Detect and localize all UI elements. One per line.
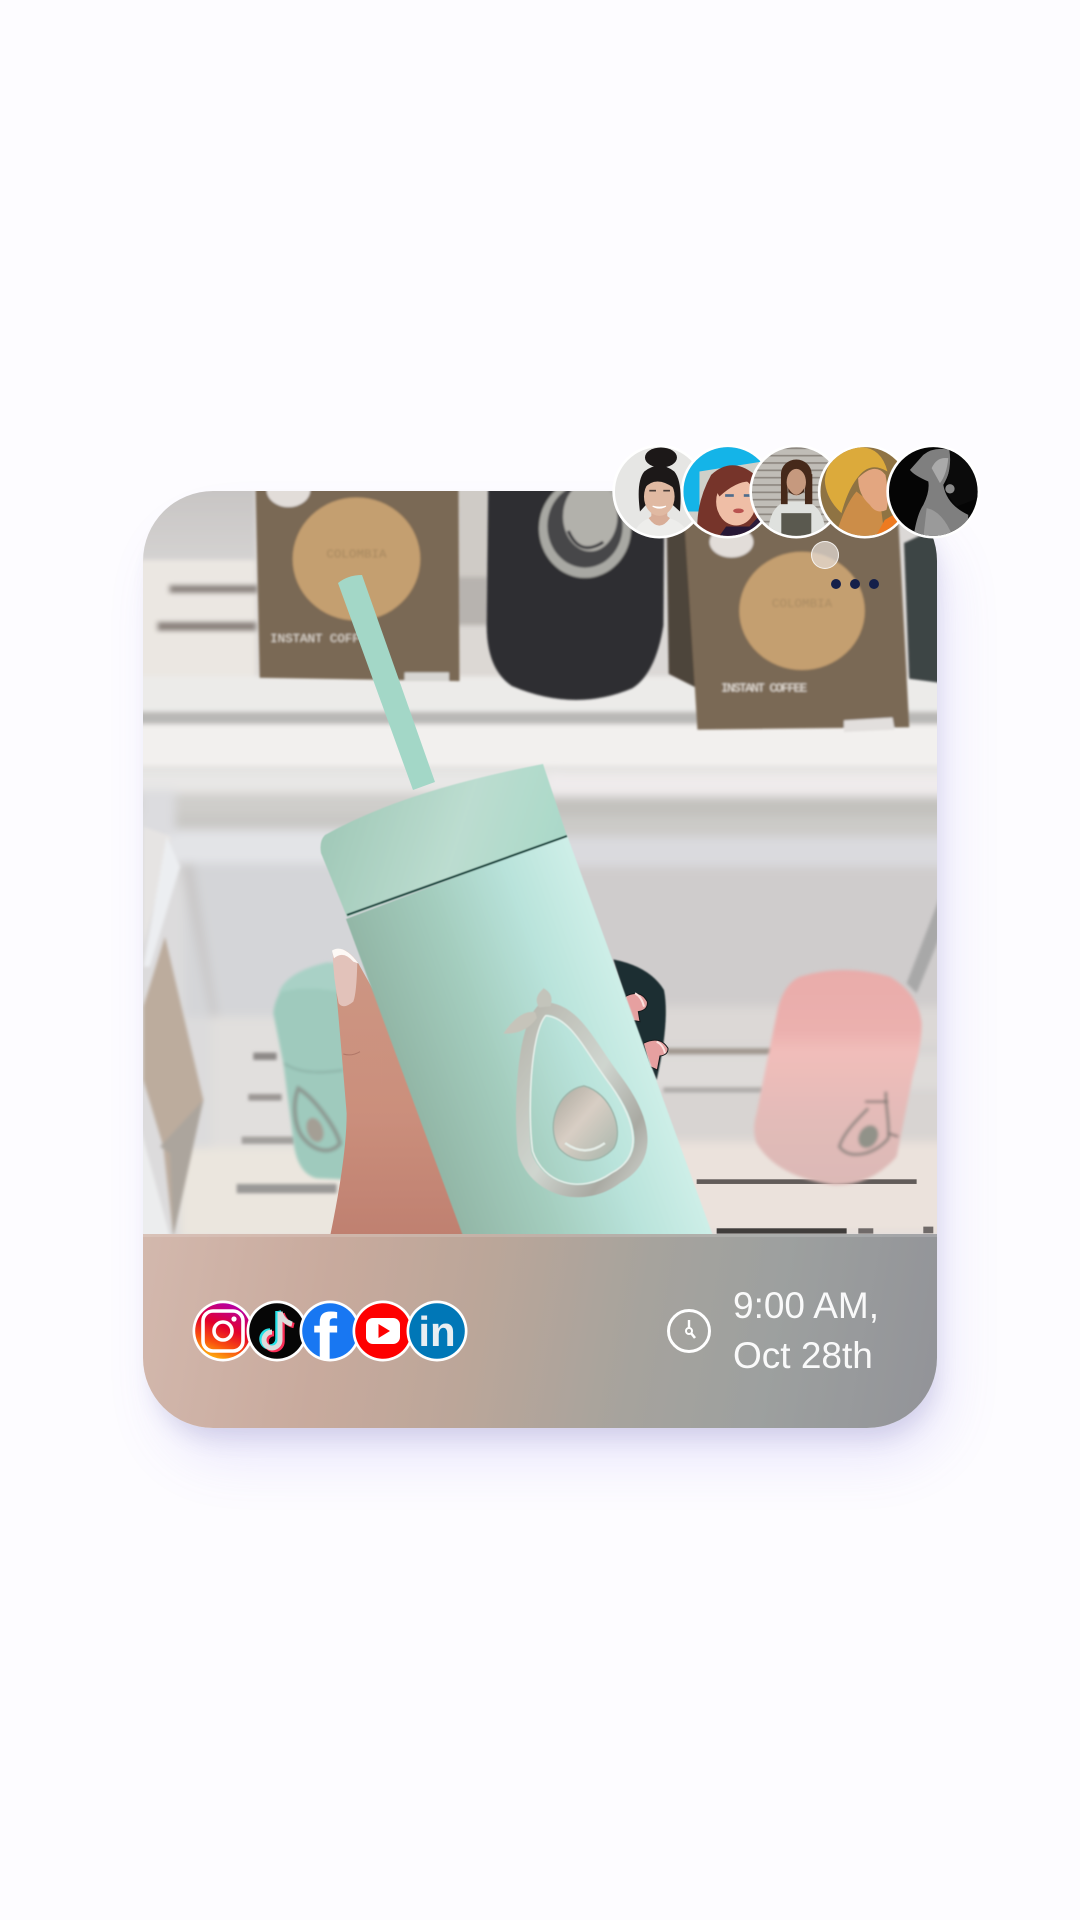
coffee box right <box>666 480 946 732</box>
schedule date and time: Oct 28th <box>733 1335 873 1376</box>
blurred pink tumbler <box>754 970 922 1185</box>
tumbler <box>320 764 713 1236</box>
upper shelf scene <box>130 472 967 819</box>
straw <box>338 575 435 790</box>
avatar 2 <box>680 447 762 538</box>
product photo: mint tumbler on a shelf <box>143 491 937 1234</box>
blurred mint tumbler <box>273 963 357 1180</box>
black bottle <box>487 479 665 700</box>
avatar 3 <box>749 447 830 538</box>
coffee box left <box>256 472 459 681</box>
icon: LinkedIn <box>406 1300 468 1362</box>
icon: clock <box>667 1309 711 1353</box>
icon: TikTok <box>246 1300 308 1362</box>
fingertips behind tumbler <box>625 993 668 1070</box>
coffee box left: INSTANT COFFEE <box>270 632 375 646</box>
avatar 4 <box>818 447 899 538</box>
lower shelf left side <box>130 773 573 1247</box>
progress handle <box>811 541 839 569</box>
lower shelf right side <box>547 773 980 1240</box>
coffee box left: COLOMBIA <box>326 548 387 561</box>
hand <box>330 949 467 1237</box>
blurred dark bottle <box>613 959 666 1080</box>
post card <box>143 491 937 1428</box>
schedule date and time: 9:00 AM, <box>733 1285 879 1326</box>
avatar 1 <box>612 447 694 538</box>
social network icons <box>192 1300 468 1362</box>
icon: YouTube <box>352 1300 414 1362</box>
icon: Instagram <box>192 1300 254 1362</box>
icon: Facebook <box>300 1300 356 1362</box>
avocado logo <box>503 988 641 1191</box>
audience avatars <box>612 447 978 538</box>
more options dots <box>831 579 879 589</box>
shelf background <box>130 480 967 819</box>
avatar 5 <box>886 445 980 538</box>
bottom panel <box>143 1234 937 1428</box>
schedule date and time <box>733 1285 879 1376</box>
coffee box right: INSTANT COFFEE <box>721 682 807 695</box>
icon: LinkedIn: in <box>418 1308 456 1355</box>
coffee box right: COLOMBIA <box>772 597 833 611</box>
